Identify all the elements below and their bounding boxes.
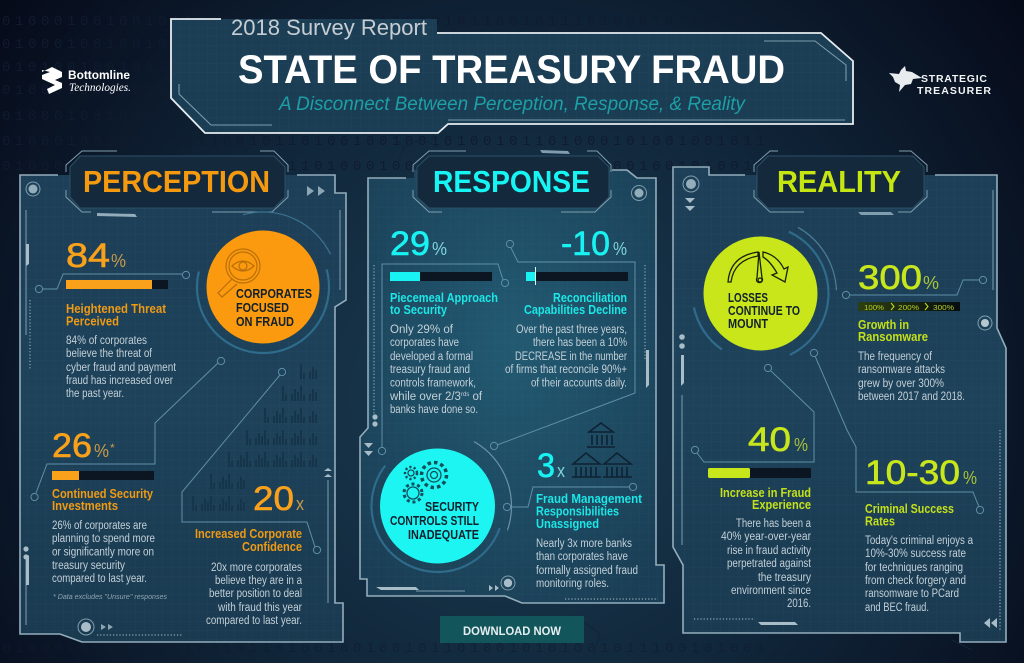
stat: 26 percent: * xyxy=(110,441,115,455)
stat: 40 percent xyxy=(691,364,814,610)
perception frame xyxy=(20,175,346,642)
logo: Bottomline Technologies xyxy=(42,67,131,94)
main title: STATE OF TREASURY FRAUD xyxy=(238,48,785,92)
stat: 20x: with fraud this year xyxy=(217,602,302,614)
stat: 26 percent: Continued Security xyxy=(52,487,153,501)
stat: 40 percent: 40% year-over-year xyxy=(721,531,811,543)
stat: 40 percent: 2016. xyxy=(787,598,811,610)
stat: 84 percent: Perceived xyxy=(66,314,119,328)
stat: minus 10 percent: there has been a 10% xyxy=(533,337,627,349)
stat: 26 percent: Investments xyxy=(52,499,118,513)
progress strip: 100% xyxy=(864,305,884,312)
reality heading xyxy=(754,151,927,212)
logo: Bottomline Technologies: Technologies. xyxy=(69,80,131,94)
losses continue to mount circle: LOSSES xyxy=(728,291,768,305)
stat: 3x xyxy=(503,423,643,590)
stat: 10-30 percent: ransomware to PCard xyxy=(865,588,959,600)
reality frame xyxy=(673,167,1006,642)
stat: 40 percent: There has been a xyxy=(736,518,811,530)
stat: 3x: monitoring roles. xyxy=(536,578,609,590)
stat: 29 percent: Piecemeal Approach xyxy=(390,291,498,305)
stat: 3x: Unassigned xyxy=(536,517,599,531)
stat: 84 percent: 84% of corporates xyxy=(66,335,147,347)
response heading: RESPONSE xyxy=(433,164,590,199)
security controls circle xyxy=(336,405,539,607)
losses continue to mount circle xyxy=(657,190,864,397)
stat: 20x xyxy=(182,368,321,627)
stat: minus 10 percent: DECREASE in the number xyxy=(515,351,627,363)
bar xyxy=(708,468,811,478)
stat: 300 percent: Growth in xyxy=(858,318,909,332)
corporates focused on fraud circle: CORPORATES xyxy=(236,287,312,301)
stat: 20x: 20x more corporates xyxy=(211,562,302,574)
stat: 84 percent: 84 xyxy=(66,237,110,275)
stat: minus 10 percent: % xyxy=(613,239,627,259)
stat: 3x: formally assigned fraud xyxy=(536,565,638,577)
survey label: 2018 Survey Report xyxy=(231,15,427,40)
stat: 20x: x xyxy=(296,494,304,514)
losses continue to mount circle: MOUNT xyxy=(728,317,768,331)
download button xyxy=(440,616,584,643)
stat: 3x: 3 xyxy=(537,447,555,485)
panel: reality xyxy=(657,151,1006,642)
background: 01000100100101001001011101000100101101001011010001001010011 xyxy=(2,159,769,175)
stat: 84 percent xyxy=(35,237,190,400)
stat: minus 10 percent: Capabilities Decline xyxy=(524,303,627,317)
stat: 40 percent: % xyxy=(794,435,808,455)
stat: 26 percent: % xyxy=(94,441,109,461)
stat: 29 percent: to Security xyxy=(390,303,447,317)
background: 01000100100101011001011010010010010100101101000101001001011 xyxy=(2,134,769,150)
stat: 26 percent: compared to last year. xyxy=(52,573,147,585)
footnote: * Data excludes "Unsure" responses xyxy=(53,592,167,601)
download button: DOWNLOAD NOW xyxy=(463,624,562,638)
stat: minus 10 percent: -10 xyxy=(561,225,610,263)
stat: 84 percent: fraud has increased over xyxy=(66,375,173,387)
logo: Strategic Treasurer: TREASURER xyxy=(917,85,991,97)
stat: 26 percent: planning to spend more xyxy=(52,533,155,545)
subtitle: A Disconnect Between Perception, Response, & Reality xyxy=(278,94,746,115)
stat: 26 percent: treasury security xyxy=(52,560,125,572)
perception heading xyxy=(66,151,288,212)
stat: 29 percent: treasury fraud and xyxy=(390,364,470,376)
stat: 26 percent xyxy=(31,357,225,601)
stat: 29 percent: 29 xyxy=(390,225,430,263)
stat: minus 10 percent xyxy=(490,225,635,450)
stat: 300 percent: grew by over 300% xyxy=(858,378,944,390)
stat: 84 percent: believe the threat of xyxy=(66,348,153,360)
corporates focused on fraud circle: ON FRAUD xyxy=(236,315,294,329)
stat: 40 percent: rise in fraud activity xyxy=(727,545,811,557)
background: 01010010010110100101101000100100100101101011010100101101000 xyxy=(2,60,769,76)
logo: Bottomline Technologies: Bottomline xyxy=(68,68,130,82)
icon: magnifier with eye xyxy=(218,249,260,297)
stat: 84 percent: the past year. xyxy=(66,388,124,400)
response frame xyxy=(360,150,664,603)
stat: 20x: Increased Corporate xyxy=(195,527,302,541)
stat: 10-30 percent: Today's criminal enjoys a xyxy=(865,535,974,547)
stat: 29 percent: corporates have xyxy=(390,337,459,349)
stat: 20x: 20 xyxy=(253,480,294,518)
panel: response xyxy=(336,150,664,607)
stat: 300 percent: between 2017 and 2018. xyxy=(858,391,965,403)
stat: 20x: compared to last year. xyxy=(206,615,302,627)
title banner xyxy=(171,15,853,133)
progress strip: 300% xyxy=(933,305,954,312)
stat: minus 10 percent: Reconciliation xyxy=(553,291,627,305)
progress strip xyxy=(858,302,960,312)
stat: 29 percent: banks have done so. xyxy=(390,404,478,416)
background: 01000100100101101001011010001001010110100101110100010100101 xyxy=(2,83,769,99)
logo: Strategic Treasurer xyxy=(889,66,991,97)
stat: 3x: Fraud Management xyxy=(536,492,643,506)
stat: 300 percent: ransomware attacks xyxy=(858,364,945,376)
stat: 3x: x xyxy=(557,461,565,481)
stat: 300 percent: 300 xyxy=(858,259,922,297)
stat: 40 percent: 40 xyxy=(748,421,791,459)
stat: minus 10 percent: Over the past three years, xyxy=(516,324,627,336)
stat: 3x: than corporates have xyxy=(536,551,628,563)
stat: minus 10 percent: of their accounts daily. xyxy=(531,378,627,390)
stat: 300 percent: Ransomware xyxy=(858,330,928,344)
bar xyxy=(390,272,492,281)
stat: 29 percent: of xyxy=(469,391,483,403)
corporates focused on fraud circle xyxy=(171,195,355,379)
stat: 10-30 percent xyxy=(810,349,984,614)
stat: 20x: Confidence xyxy=(242,540,302,554)
stat: 3x: Responsibilities xyxy=(536,504,619,518)
stat: 26 percent: 26% of corporates are xyxy=(52,520,147,532)
stat: 29 percent: rds xyxy=(461,392,469,398)
stat: 10-30 percent: Rates xyxy=(865,514,895,528)
stat: 29 percent: controls framework, xyxy=(390,378,476,390)
background: 01000100100101101011001000100100101011001011101000101101001 xyxy=(2,14,769,30)
stat: 300 percent: % xyxy=(923,273,939,293)
progress strip: 200% xyxy=(898,305,919,312)
bar xyxy=(52,471,154,480)
panel: perception xyxy=(20,151,355,642)
stat: 40 percent: Experience xyxy=(752,498,811,512)
stat: 10-30 percent: 10-30 xyxy=(865,454,960,492)
losses continue to mount circle: CONTINUE TO xyxy=(728,304,800,318)
bar xyxy=(526,267,628,285)
stat: 29 percent: % xyxy=(432,239,447,259)
stat: 40 percent: environment since xyxy=(731,585,811,597)
stat: 26 percent: or significantly more on xyxy=(52,546,154,558)
stat: 10-30 percent: % xyxy=(963,468,977,488)
stat: 300 percent xyxy=(842,259,987,403)
stat: minus 10 percent: of firms that reconcile 90%+ xyxy=(505,364,627,376)
perception heading: PERCEPTION xyxy=(83,164,270,199)
stat: 84 percent: % xyxy=(111,251,126,271)
corporates focused on fraud circle: FOCUSED xyxy=(236,301,289,315)
stat: 20x: believe they are in a xyxy=(215,575,303,587)
icon: three banks xyxy=(572,423,632,477)
stat: 29 percent: Only 29% of xyxy=(390,324,454,336)
icon: gauge with down arrow xyxy=(728,252,788,283)
stat: 10-30 percent: 10%-30% success rate xyxy=(865,548,966,560)
stat: 40 percent: Increase in Fraud xyxy=(720,486,811,500)
stat: 3x: Nearly 3x more banks xyxy=(536,538,632,550)
stat: 84 percent: cyber fraud and payment xyxy=(66,362,177,374)
stat: 10-30 percent: and BEC fraud. xyxy=(865,602,929,614)
stat: 40 percent: the treasury xyxy=(758,572,811,584)
reality heading: REALITY xyxy=(777,164,901,199)
stat: 29 percent: developed a formal xyxy=(390,351,473,363)
stat: 29 percent: while over 2/3 xyxy=(390,391,461,403)
background: 01000100100101101001011010010010110100101110100010010100010 xyxy=(2,109,769,125)
security controls circle: INADEQUATE xyxy=(408,528,479,542)
stat: 29 percent xyxy=(378,225,509,455)
bar xyxy=(66,280,168,289)
stat: 10-30 percent: Criminal Success xyxy=(865,502,954,516)
security controls circle: SECURITY xyxy=(425,500,480,514)
background: 01000100100101101001011011000100100101011010010111010001011 xyxy=(2,37,769,53)
stat: 20x: better position to deal xyxy=(209,588,302,600)
stat: 10-30 percent: for techniques ranging xyxy=(865,562,963,574)
icon: gears xyxy=(404,462,446,502)
stat: 300 percent: The frequency of xyxy=(858,351,933,363)
stat: 40 percent: perpetrated against xyxy=(727,558,812,570)
response heading xyxy=(413,151,611,212)
stat: 26 percent: 26 xyxy=(52,427,92,465)
stat: 10-30 percent: from check forgery and xyxy=(865,575,966,587)
stat: 84 percent: Heightened Threat xyxy=(66,302,167,316)
security controls circle: CONTROLS STILL xyxy=(390,514,479,528)
background: 01000100100101100101101001001001011010010101001011100101001 xyxy=(2,641,769,657)
logo: Strategic Treasurer: STRATEGIC xyxy=(921,73,987,85)
